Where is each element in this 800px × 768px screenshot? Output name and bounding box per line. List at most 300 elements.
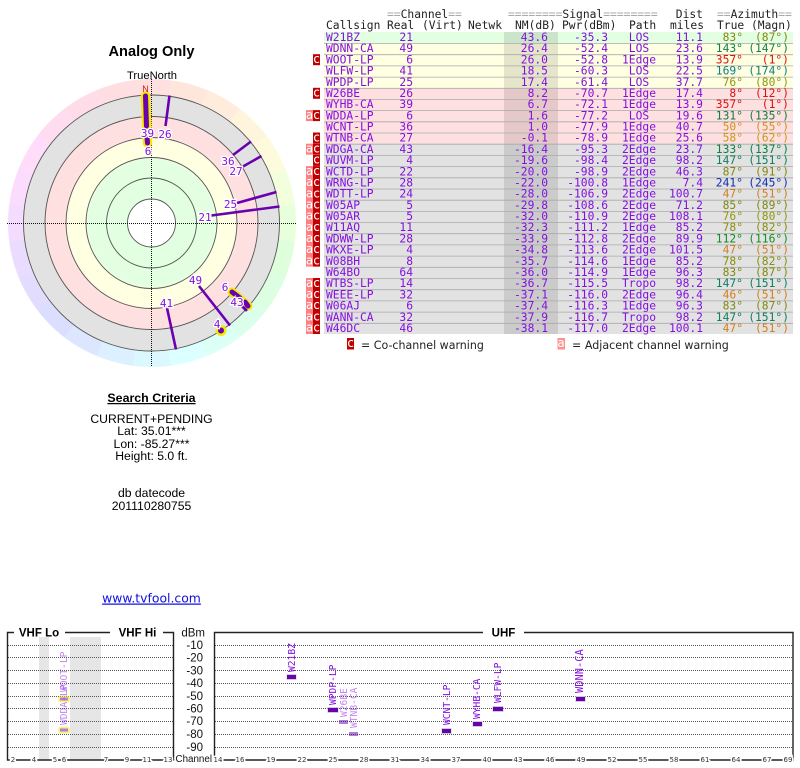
table row: W46DC: -117.0 — [567, 322, 608, 335]
table row: WUVM-LP: -98.4 — [574, 154, 608, 167]
dBm axis: dBm — [181, 628, 205, 640]
legend: co-channel warning: c — [347, 336, 354, 350]
table row: WTNB-CA: (62°) — [755, 132, 789, 145]
UHF channel ticks: 67 — [763, 756, 771, 764]
station channel labels: 41 — [160, 297, 173, 310]
table row: WANN-CA: 32 — [399, 311, 413, 324]
table row: W11AQ — [326, 221, 789, 234]
table row: W46DC: 2Edge — [622, 322, 656, 335]
table row: W05AP: W05AP — [326, 199, 360, 212]
table headers: ==Azimuth== — [717, 8, 792, 21]
table row: WYHB-CA: 357° — [716, 98, 743, 111]
legend: co-channel warning: = Co-channel warning — [361, 339, 484, 352]
table row: WYHB-CA: 13.9 — [676, 98, 703, 111]
table row: WDNN-CA — [326, 42, 789, 55]
signal strength bands — [324, 32, 793, 334]
table headers: (Virt) — [422, 19, 463, 32]
table row: WTNB-CA: -0.1 — [521, 132, 548, 145]
table row: WRNG-LP: 7.4 — [683, 176, 703, 190]
table row: WCNT-LP: (55°) — [755, 120, 789, 134]
table row: WDGA-CA: 133° — [716, 143, 743, 156]
table row: WYHB-CA: WYHB-CA — [326, 98, 374, 111]
table row: W05AR: W05AR — [326, 210, 360, 223]
table row: W05AP: 85° — [723, 199, 743, 212]
warning badges: c — [313, 231, 320, 245]
table row: W05AP: 71.2 — [676, 199, 703, 212]
UHF heading: UHF — [492, 628, 515, 640]
table row: W06AJ: 6 — [406, 300, 413, 313]
table row: W06AJ: -37.4 — [514, 300, 548, 313]
table row: WRNG-LP: -22.0 — [514, 176, 548, 190]
table row: WTNB-CA — [326, 132, 789, 145]
table row: W06AJ: -116.3 — [567, 300, 608, 313]
table row: WRNG-LP: (245°) — [748, 176, 789, 190]
table row: WTNB-CA: WTNB-CA — [326, 132, 374, 145]
table row: W64BO: -36.0 — [514, 266, 548, 279]
table row: WPDP-LP: (80°) — [755, 76, 789, 89]
table row: W64BO: W64BO — [326, 266, 360, 279]
search criteria block: CURRENT+PENDING — [90, 412, 213, 426]
table row: WDTT-LP: 24 — [399, 188, 413, 201]
WOOT-LP bar: WOOT-LP — [59, 651, 70, 692]
station channel labels: 21 — [198, 211, 212, 224]
table row: WOOT-LP: 1Edge — [622, 53, 656, 66]
table row: WRNG-LP: 28 — [399, 176, 413, 190]
table row: WCTD-LP: -98.9 — [574, 165, 608, 178]
VHF channel ticks: 2 — [11, 756, 15, 764]
table row: W26BE: 1Edge — [622, 87, 656, 100]
table row: WTNB-CA: 58° — [723, 132, 743, 145]
dBm axis: -60 — [186, 704, 203, 716]
table row: WDGA-CA: 43 — [399, 143, 413, 156]
table row: WKXE-LP: WKXE-LP — [326, 244, 374, 257]
table row: WDWW-LP: 89.9 — [676, 232, 703, 245]
table row: WTBS-LP: Tropo — [622, 277, 656, 290]
table row: WCNT-LP: 1.0 — [528, 120, 548, 134]
UHF channel ticks: 61 — [701, 756, 709, 764]
table row: WDWW-LP: 28 — [399, 232, 413, 245]
table headers: (Magn) — [751, 19, 792, 32]
table headers: True — [717, 19, 744, 32]
table row: WDNN-CA: -52.4 — [574, 42, 608, 55]
table row: W26BE: 17.4 — [676, 87, 703, 100]
table row: W05AR: -110.9 — [567, 210, 608, 223]
table row: WDGA-CA: 2Edge — [622, 143, 656, 156]
table row: W26BE: 8.2 — [528, 87, 548, 100]
table row: WANN-CA: -37.9 — [514, 311, 548, 324]
table row: WDDA-LP: WDDA-LP — [326, 109, 374, 122]
table row: WKXE-LP: 47° — [723, 244, 743, 257]
UHF spectrum chart — [214, 628, 793, 764]
database date code — [112, 486, 191, 513]
UHF channel ticks: 40 — [483, 756, 491, 764]
warning badges: a — [306, 175, 313, 189]
table row: WDDA-LP: 1.6 — [528, 109, 548, 122]
table row: WPDP-LP: LOS — [629, 76, 649, 89]
UHF channel ticks: 28 — [360, 756, 368, 764]
table row: WDNN-CA: 26.4 — [521, 42, 548, 55]
station channel labels: 43 — [230, 296, 244, 309]
warning badges: a — [306, 108, 313, 122]
warning badges — [306, 52, 320, 334]
warning badges: a — [306, 276, 313, 290]
table row: W05AR: 108.1 — [669, 210, 703, 223]
table headers: Netwk — [468, 19, 502, 32]
table row: W46DC: (51°) — [755, 322, 789, 335]
table row: WUVM-LP: 147° — [716, 154, 743, 167]
table row: WOOT-LP: (1°) — [762, 53, 789, 66]
table row: W11AQ: -111.2 — [567, 221, 608, 234]
table row: WDDA-LP: (135°) — [748, 109, 789, 122]
table row: WYHB-CA: -72.1 — [574, 98, 608, 111]
table row: WANN-CA: 98.2 — [676, 311, 703, 324]
table row: W06AJ: 96.3 — [676, 300, 703, 313]
table row: WDTT-LP: 47° — [723, 188, 743, 201]
table row: WDTT-LP: -28.0 — [514, 188, 548, 201]
north marker: N — [142, 84, 149, 94]
UHF channel ticks: 46 — [546, 756, 555, 764]
table row: WDWW-LP: (116°) — [748, 232, 789, 245]
table row: WDTT-LP: 100.7 — [669, 188, 703, 201]
table row: WUVM-LP — [326, 154, 789, 167]
table headers — [326, 8, 792, 32]
VHF channel ticks: 11 — [143, 756, 151, 764]
table row: WTBS-LP: 14 — [399, 277, 413, 290]
table row: W06AJ — [326, 300, 789, 313]
table row: WPDP-LP — [326, 76, 789, 89]
table row: WDGA-CA — [326, 143, 789, 156]
TrueNorth label: TrueNorth — [127, 70, 177, 82]
table row: W21BZ: (87°) — [755, 31, 789, 44]
table row: WDNN-CA: LOS — [629, 42, 649, 55]
dBm axis: -40 — [186, 678, 203, 690]
table row: WUVM-LP: 98.2 — [676, 154, 703, 167]
table row: WLFW-LP: WLFW-LP — [326, 65, 374, 78]
table row: WLFW-LP: 18.5 — [521, 65, 548, 78]
table row: WKXE-LP: (51°) — [755, 244, 789, 257]
warning badges: a — [306, 164, 313, 178]
VHF channel ticks: 4 — [32, 756, 37, 764]
table row: WCNT-LP: WCNT-LP — [326, 120, 374, 134]
dBm axis: -80 — [186, 729, 203, 741]
VHF channel ticks — [11, 756, 172, 764]
table row: WCTD-LP — [326, 165, 789, 178]
table row: WYHB-CA: 39 — [399, 98, 413, 111]
W21BZ bar: W21BZ — [287, 643, 298, 672]
table row: WDTT-LP: (51°) — [755, 188, 789, 201]
station channel labels: 26 — [158, 128, 172, 141]
table row: W05AP: -29.8 — [514, 199, 548, 212]
table row: W11AQ: -32.3 — [514, 221, 548, 234]
table row: W06AJ: 83° — [723, 300, 743, 313]
table row: WEEE-LP: -37.1 — [514, 288, 548, 301]
warning badges: c — [313, 86, 320, 100]
warning badges: a — [306, 142, 313, 156]
warning badges: a — [306, 186, 313, 200]
warning badges: c — [313, 198, 320, 212]
table row: WEEE-LP: 46° — [723, 288, 743, 301]
table row: W64BO: (87°) — [755, 266, 789, 279]
table row: W06AJ: W06AJ — [326, 300, 360, 313]
table row: W06AJ: (87°) — [755, 300, 789, 313]
warning badges: a — [306, 209, 313, 223]
warning badges: c — [313, 309, 320, 323]
table row: WTBS-LP: WTBS-LP — [326, 277, 374, 290]
VHF Lo heading: VHF Lo — [19, 628, 59, 640]
UHF channel ticks: 43 — [514, 756, 522, 764]
warning badges: c — [313, 253, 320, 267]
title: Analog Only — [109, 44, 195, 60]
table row: WPDP-LP: WPDP-LP — [326, 76, 374, 89]
warning badges: c — [313, 52, 320, 66]
website link: www.tvfool.com — [102, 590, 201, 606]
table row: W21BZ: 11.1 — [676, 31, 703, 44]
table row: WUVM-LP: (151°) — [748, 154, 789, 167]
table row: WTNB-CA: 27 — [399, 132, 413, 145]
table row: WDWW-LP: 112° — [716, 232, 743, 245]
table row: WCTD-LP: 46.3 — [676, 165, 703, 178]
VHF channel ticks: 7 — [104, 756, 108, 764]
table row: WRNG-LP: 241° — [716, 176, 743, 190]
table row: W05AR: 2Edge — [622, 210, 656, 223]
table row: W08BH: (82°) — [755, 255, 789, 268]
table row: W08BH: 1Edge — [622, 255, 656, 268]
table row: WANN-CA — [326, 311, 789, 324]
station channel labels: 36 — [221, 155, 235, 168]
table row: WPDP-LP: 17.4 — [521, 76, 548, 89]
table row: W05AR: 76° — [723, 210, 743, 223]
table row: W26BE: 26 — [399, 87, 413, 100]
table row: W11AQ: 1Edge — [622, 221, 656, 234]
UHF channel ticks: 25 — [329, 756, 337, 764]
station channel labels — [141, 127, 244, 331]
table row: WPDP-LP: 76° — [723, 76, 743, 89]
table row: W46DC: -38.1 — [514, 322, 548, 335]
table row: WCNT-LP — [326, 120, 789, 134]
table row: WEEE-LP: (51°) — [755, 288, 789, 301]
warning badges: a — [306, 198, 313, 212]
station channel labels: 39 — [141, 127, 154, 140]
table row: WKXE-LP: -113.6 — [567, 244, 608, 257]
dBm axis: -90 — [186, 742, 203, 754]
table row: WCTD-LP: 22 — [399, 165, 413, 178]
table row: WYHB-CA: 6.7 — [528, 98, 548, 111]
table row: WDNN-CA: 23.6 — [676, 42, 703, 55]
table row: WLFW-LP: 169° — [716, 65, 743, 78]
UHF channel ticks: 22 — [298, 756, 306, 764]
WPDP-LP bar: WPDP-LP — [328, 664, 339, 705]
warning badges: c — [313, 142, 320, 156]
table row: WDGA-CA: 23.7 — [676, 143, 703, 156]
warning badges: a — [306, 309, 313, 323]
table row: WTBS-LP — [326, 277, 789, 290]
UHF channel ticks: 31 — [391, 756, 399, 764]
table headers: NM(dB) — [515, 19, 556, 32]
UHF channel ticks: 69 — [784, 756, 792, 764]
table row: W64BO — [326, 266, 789, 279]
table row: W05AP: 5 — [406, 199, 413, 212]
table headers: Callsign — [326, 19, 380, 32]
database date code: db datecode — [118, 486, 185, 500]
UHF channel ticks: 34 — [421, 756, 430, 764]
UHF channel ticks: 55 — [639, 756, 647, 764]
table row: W26BE: W26BE — [326, 87, 360, 100]
table row: W46DC: 100.1 — [669, 322, 703, 335]
table row: WOOT-LP: 26.0 — [521, 53, 548, 66]
table row: WDGA-CA: -16.4 — [514, 143, 548, 156]
warning badges: c — [313, 175, 320, 189]
table row: WOOT-LP — [326, 53, 789, 66]
table row: WRNG-LP: -100.8 — [567, 176, 608, 190]
dBm axis: -50 — [186, 691, 203, 703]
table row: WLFW-LP: 22.5 — [676, 65, 703, 78]
table row: WTBS-LP: -36.7 — [514, 277, 548, 290]
UHF channel ticks: 64 — [732, 756, 741, 764]
station channel labels: 25 — [224, 198, 237, 211]
table headers: Path — [629, 19, 656, 32]
table headers: ========Signal======== — [508, 8, 658, 21]
table row: WKXE-LP — [326, 244, 789, 257]
table row: WUVM-LP: 2Edge — [622, 154, 656, 167]
table row: WDWW-LP — [326, 232, 789, 245]
table row: WKXE-LP: 101.5 — [669, 244, 703, 257]
table row: W06AJ: 1Edge — [622, 300, 656, 313]
dBm axis: -30 — [186, 666, 203, 678]
VHF spectrum chart — [8, 628, 174, 764]
table row: WANN-CA: (151°) — [748, 311, 789, 324]
table row: W05AR: (80°) — [755, 210, 789, 223]
warning badges: a — [306, 242, 313, 256]
table row: WRNG-LP — [326, 176, 789, 190]
table row: W64BO: -114.9 — [567, 266, 608, 279]
table row: W64BO: 64 — [399, 266, 413, 279]
table row: W08BH — [326, 255, 789, 268]
table row: WTBS-LP: 147° — [716, 277, 743, 290]
table row: WEEE-LP — [326, 288, 789, 301]
table row: WLFW-LP: -60.3 — [574, 65, 608, 78]
table row: WTNB-CA: -78.9 — [574, 132, 608, 145]
warning badges: a — [306, 220, 313, 234]
UHF channel ticks: 52 — [608, 756, 616, 764]
UHF channel ticks — [214, 756, 792, 764]
table row: WCNT-LP: -77.9 — [574, 120, 608, 134]
table row: W21BZ: 83° — [723, 31, 743, 44]
table row: WUVM-LP: WUVM-LP — [326, 154, 374, 167]
table row: WEEE-LP: 2Edge — [622, 288, 656, 301]
table row: W05AR: 5 — [406, 210, 413, 223]
WLFW-LP bar: WLFW-LP — [493, 662, 504, 703]
warning badges: a — [306, 287, 313, 301]
table row: WDNN-CA: 143° — [716, 42, 743, 55]
table row: WANN-CA: -116.7 — [567, 311, 608, 324]
station channel labels: 6 — [145, 145, 151, 158]
table row: WOOT-LP: WOOT-LP — [326, 53, 374, 66]
warning badges: c — [313, 287, 320, 301]
station table — [306, 8, 793, 335]
warning badges: c — [313, 186, 320, 200]
table row: WDDA-LP: 19.6 — [676, 109, 703, 122]
table row: WYHB-CA: 1Edge — [622, 98, 656, 111]
search criteria block: Lat: 35.01*** — [117, 424, 186, 438]
table row: WEEE-LP: WEEE-LP — [326, 288, 374, 301]
table row: WCTD-LP: WCTD-LP — [326, 165, 374, 178]
table row: WOOT-LP: 357° — [716, 53, 743, 66]
table row: W21BZ: LOS — [629, 31, 649, 44]
table row: WCNT-LP: 36 — [399, 120, 413, 134]
table headers: Real — [387, 19, 414, 32]
warning badges: c — [313, 242, 320, 256]
dBm axis: -20 — [186, 652, 203, 664]
table row: WLFW-LP: 41 — [399, 65, 413, 78]
WYHB-CA bar: WYHB-CA — [472, 678, 483, 719]
table row: WPDP-LP: -61.4 — [574, 76, 608, 89]
table row: W26BE: -70.7 — [574, 87, 608, 100]
search criteria block — [90, 391, 213, 463]
table row: WEEE-LP: 32 — [399, 288, 413, 301]
station channel labels: 6 — [222, 281, 228, 294]
table row: WRNG-LP: 1Edge — [622, 176, 656, 190]
table row: WTNB-CA: 1Edge — [622, 132, 656, 145]
table row: W64BO: 96.3 — [676, 266, 703, 279]
warning badges: c — [313, 220, 320, 234]
W26BE bar: W26BE — [339, 688, 350, 717]
dBm axis — [176, 628, 212, 765]
legend: adjacent channel warning: = Adjacent channel warning — [572, 339, 729, 352]
polar chart outer colour ring — [8, 79, 296, 367]
table row: WANN-CA: 147° — [716, 311, 743, 324]
warning badges: c — [313, 153, 320, 167]
WDNN-CA bar: WDNN-CA — [574, 648, 586, 693]
table row: W46DC: W46DC — [326, 322, 360, 335]
table row: WTBS-LP: 98.2 — [676, 277, 703, 290]
table row: W05AP: (89°) — [755, 199, 789, 212]
table row: W46DC: 46 — [399, 322, 413, 335]
table row: W64BO: 1Edge — [622, 266, 656, 279]
table row: WTBS-LP: (151°) — [748, 277, 789, 290]
table row: W46DC — [326, 322, 789, 335]
table row: WTBS-LP: -115.5 — [567, 277, 608, 290]
table row: WLFW-LP: LOS — [629, 65, 649, 78]
WDDA-LP bar: WDDA-LP — [59, 684, 70, 725]
table row: WDNN-CA: 49 — [399, 42, 413, 55]
table row: W11AQ: 78° — [723, 221, 743, 234]
warning badges: c — [313, 298, 320, 312]
UHF channel ticks: 19 — [267, 756, 275, 764]
table row: W26BE: (12°) — [755, 87, 789, 100]
VHF channel ticks: 5 — [53, 756, 57, 764]
station channel labels: 49 — [189, 274, 202, 287]
dBm axis: -10 — [186, 640, 203, 652]
UHF channel ticks: 16 — [236, 756, 245, 764]
warning badges: c — [313, 130, 320, 144]
table row: WDWW-LP: -112.8 — [567, 232, 608, 245]
table row: WUVM-LP: 4 — [406, 154, 413, 167]
WCNT-LP bar: WCNT-LP — [442, 684, 453, 725]
VHF Hi heading: VHF Hi — [119, 628, 156, 640]
table row: WDWW-LP: WDWW-LP — [326, 232, 374, 245]
polar signal chart — [7, 70, 296, 367]
table row: WDDA-LP — [326, 109, 789, 122]
table row: WDGA-CA: -95.3 — [574, 143, 608, 156]
table row: W05AP: 2Edge — [622, 199, 656, 212]
warning badges: a — [306, 253, 313, 267]
table row: WANN-CA: WANN-CA — [326, 311, 374, 324]
table row: WLFW-LP — [326, 65, 789, 78]
table row: WYHB-CA — [326, 98, 789, 111]
table row: WCTD-LP: 2Edge — [622, 165, 656, 178]
table row: W21BZ: -35.3 — [574, 31, 608, 44]
table row: W08BH: -35.7 — [514, 255, 548, 268]
